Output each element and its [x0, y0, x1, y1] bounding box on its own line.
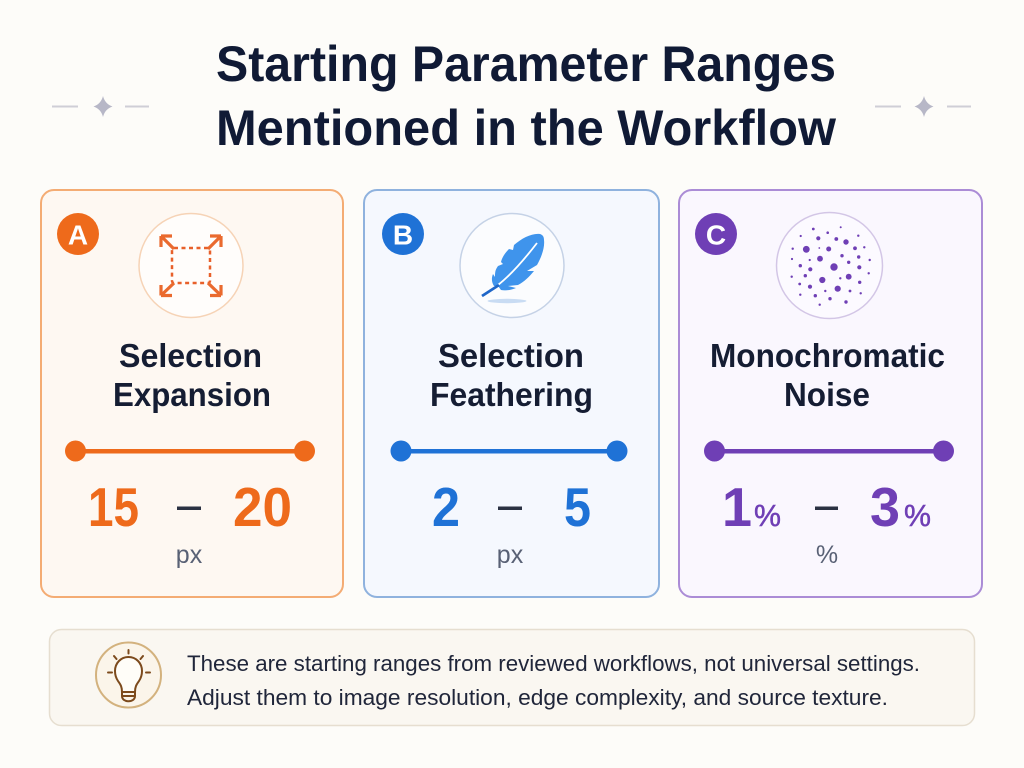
range slider — [65, 440, 315, 462]
range values: 1 — [722, 476, 752, 538]
panel: monochromatic noise — [679, 190, 982, 597]
note text: Adjust them to image resolution, edge complexity, and source texture. — [187, 685, 888, 710]
heading: selection expansion: Selection — [119, 337, 262, 374]
icon: noise dots — [776, 212, 882, 318]
heading: selection expansion: Expansion — [113, 376, 271, 413]
range values: 3 — [870, 476, 900, 538]
title: Starting Parameter Ranges — [216, 36, 836, 92]
badge B: B — [393, 220, 413, 250]
range values: % — [754, 498, 781, 533]
panel: selection expansion — [41, 190, 343, 597]
note text: These are starting ranges from reviewed workflows, not universal settings. — [187, 651, 920, 676]
note text — [187, 651, 920, 710]
range values: 20 — [233, 476, 292, 538]
heading: selection expansion — [113, 337, 271, 413]
ornament: right — [875, 96, 971, 117]
title: Mentioned in the Workflow — [216, 100, 836, 156]
range values: 2 — [432, 476, 460, 538]
heading: selection feathering: Feathering — [430, 376, 593, 413]
range values — [88, 476, 292, 538]
range values: % — [904, 498, 931, 533]
heading: selection feathering — [430, 337, 593, 413]
badge A: A — [68, 220, 88, 250]
heading: monochromatic noise: Monochromatic — [710, 337, 945, 374]
icon: light bulb — [96, 642, 161, 708]
badge A — [57, 213, 99, 255]
title — [216, 36, 836, 156]
badge B — [382, 213, 424, 255]
range values: 15 — [88, 476, 139, 538]
range values — [432, 476, 591, 538]
range values: 5 — [564, 476, 591, 538]
range slider — [390, 440, 628, 462]
icon: expand selection — [139, 214, 243, 318]
badge C — [695, 213, 737, 255]
panel: selection feathering — [364, 190, 659, 597]
callout: note — [50, 630, 974, 726]
range values — [722, 476, 931, 538]
unit: px — [176, 541, 203, 569]
heading: selection feathering: Selection — [438, 337, 584, 374]
ornament: left — [52, 96, 149, 117]
badge C: C — [706, 220, 726, 250]
heading: monochromatic noise: Noise — [784, 376, 870, 413]
heading: monochromatic noise — [710, 337, 945, 413]
unit: px — [497, 541, 524, 569]
icon: feather — [460, 214, 564, 318]
range slider — [704, 440, 954, 462]
unit: % — [816, 541, 838, 569]
